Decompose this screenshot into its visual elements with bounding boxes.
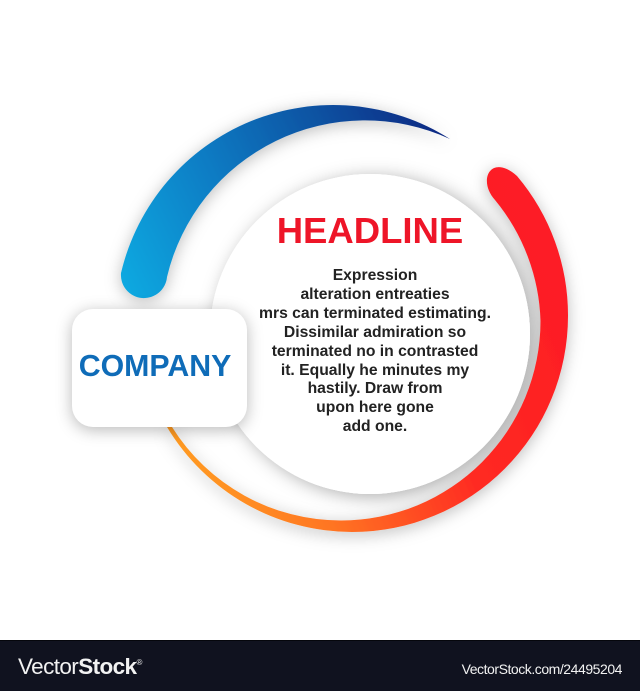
company card — [72, 309, 247, 427]
body text: add one. — [343, 418, 407, 435]
footer bar — [0, 640, 640, 691]
body text: it. Equally he minutes my — [281, 362, 469, 379]
red to orange arc — [167, 167, 568, 532]
body text: Expression — [333, 267, 417, 284]
body text: terminated no in contrasted — [272, 343, 478, 360]
image URL: VectorStock.com/24495204 — [462, 661, 622, 677]
headline: HEADLINE — [277, 210, 463, 251]
body text: hastily. Draw from — [308, 380, 442, 397]
body text — [259, 267, 491, 435]
body text: Dissimilar admiration so — [284, 324, 466, 341]
body text: mrs can terminated estimating. — [259, 305, 491, 322]
blue arc — [121, 105, 450, 298]
body text: alteration entreaties — [300, 286, 450, 303]
VectorStock logo: VectorStock® — [18, 654, 142, 679]
body text: upon here gone — [316, 399, 434, 416]
company name: COMPANY — [79, 350, 231, 383]
inner white circle — [210, 174, 530, 494]
